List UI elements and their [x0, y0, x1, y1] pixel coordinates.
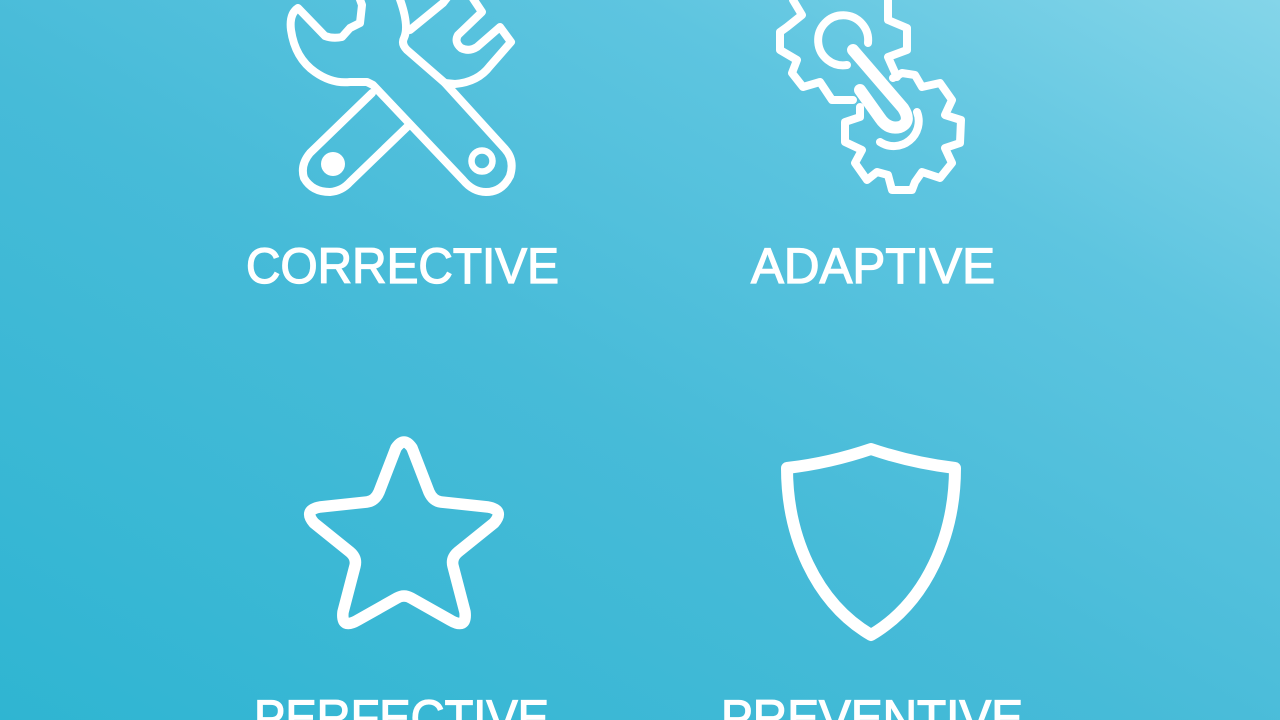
icon detail: wrench hole solid: [321, 152, 345, 176]
icon: linked gears: [780, 0, 961, 190]
icon: star: [310, 442, 498, 624]
icon: crossed wrenches: [291, 0, 512, 192]
icon detail: wrench hole ring: [472, 150, 492, 172]
icon: shield: [787, 449, 955, 635]
label: corrective: CORRECTIVE: [246, 238, 559, 294]
label: adaptive: ADAPTIVE: [751, 238, 995, 294]
